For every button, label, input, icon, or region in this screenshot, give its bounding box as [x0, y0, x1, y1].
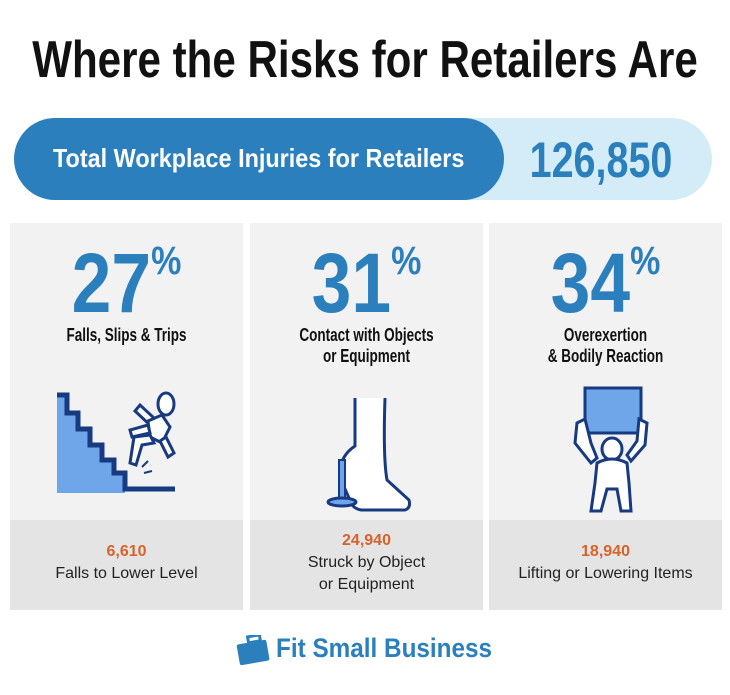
caption: Falls, Slips & Trips — [66, 325, 187, 345]
total pill — [14, 118, 712, 200]
caption — [548, 325, 663, 366]
bottom stat — [10, 520, 243, 610]
percent: 31% — [312, 236, 421, 330]
bottom stat: 6,610 — [106, 543, 147, 560]
bottom stat: Lifting or Lowering Items — [518, 565, 693, 582]
bottom stat — [250, 520, 483, 610]
total pill: 126,850 — [530, 132, 672, 188]
panel: contact — [250, 223, 483, 610]
bottom stat: 18,940 — [581, 543, 630, 560]
brand name: Fit Small Business — [276, 633, 492, 663]
bottom stat — [489, 520, 722, 610]
icon: lifting person — [573, 386, 649, 512]
bottom stat: 24,940 — [342, 532, 391, 549]
caption: & Bodily Reaction — [548, 346, 663, 366]
caption — [299, 325, 434, 366]
caption: or Equipment — [323, 346, 410, 366]
percent: 27% — [72, 236, 181, 330]
logo — [236, 633, 492, 665]
panel: overexertion — [489, 223, 722, 610]
title: Where the Risks for Retailers Are — [32, 31, 698, 89]
caption: Overexertion — [564, 325, 647, 345]
icon: stairs fall — [57, 392, 176, 493]
bottom stat: Struck by Object — [308, 554, 425, 571]
icon: briefcase — [236, 635, 270, 665]
bottom stat: Falls to Lower Level — [55, 565, 198, 582]
caption: Contact with Objects — [299, 325, 434, 345]
panel: falls — [10, 223, 243, 610]
percent: 34% — [551, 236, 660, 330]
bottom stat: or Equipment — [319, 576, 414, 593]
icon: foot on nail — [326, 398, 411, 512]
total pill: Total Workplace Injuries for Retailers — [53, 143, 464, 173]
